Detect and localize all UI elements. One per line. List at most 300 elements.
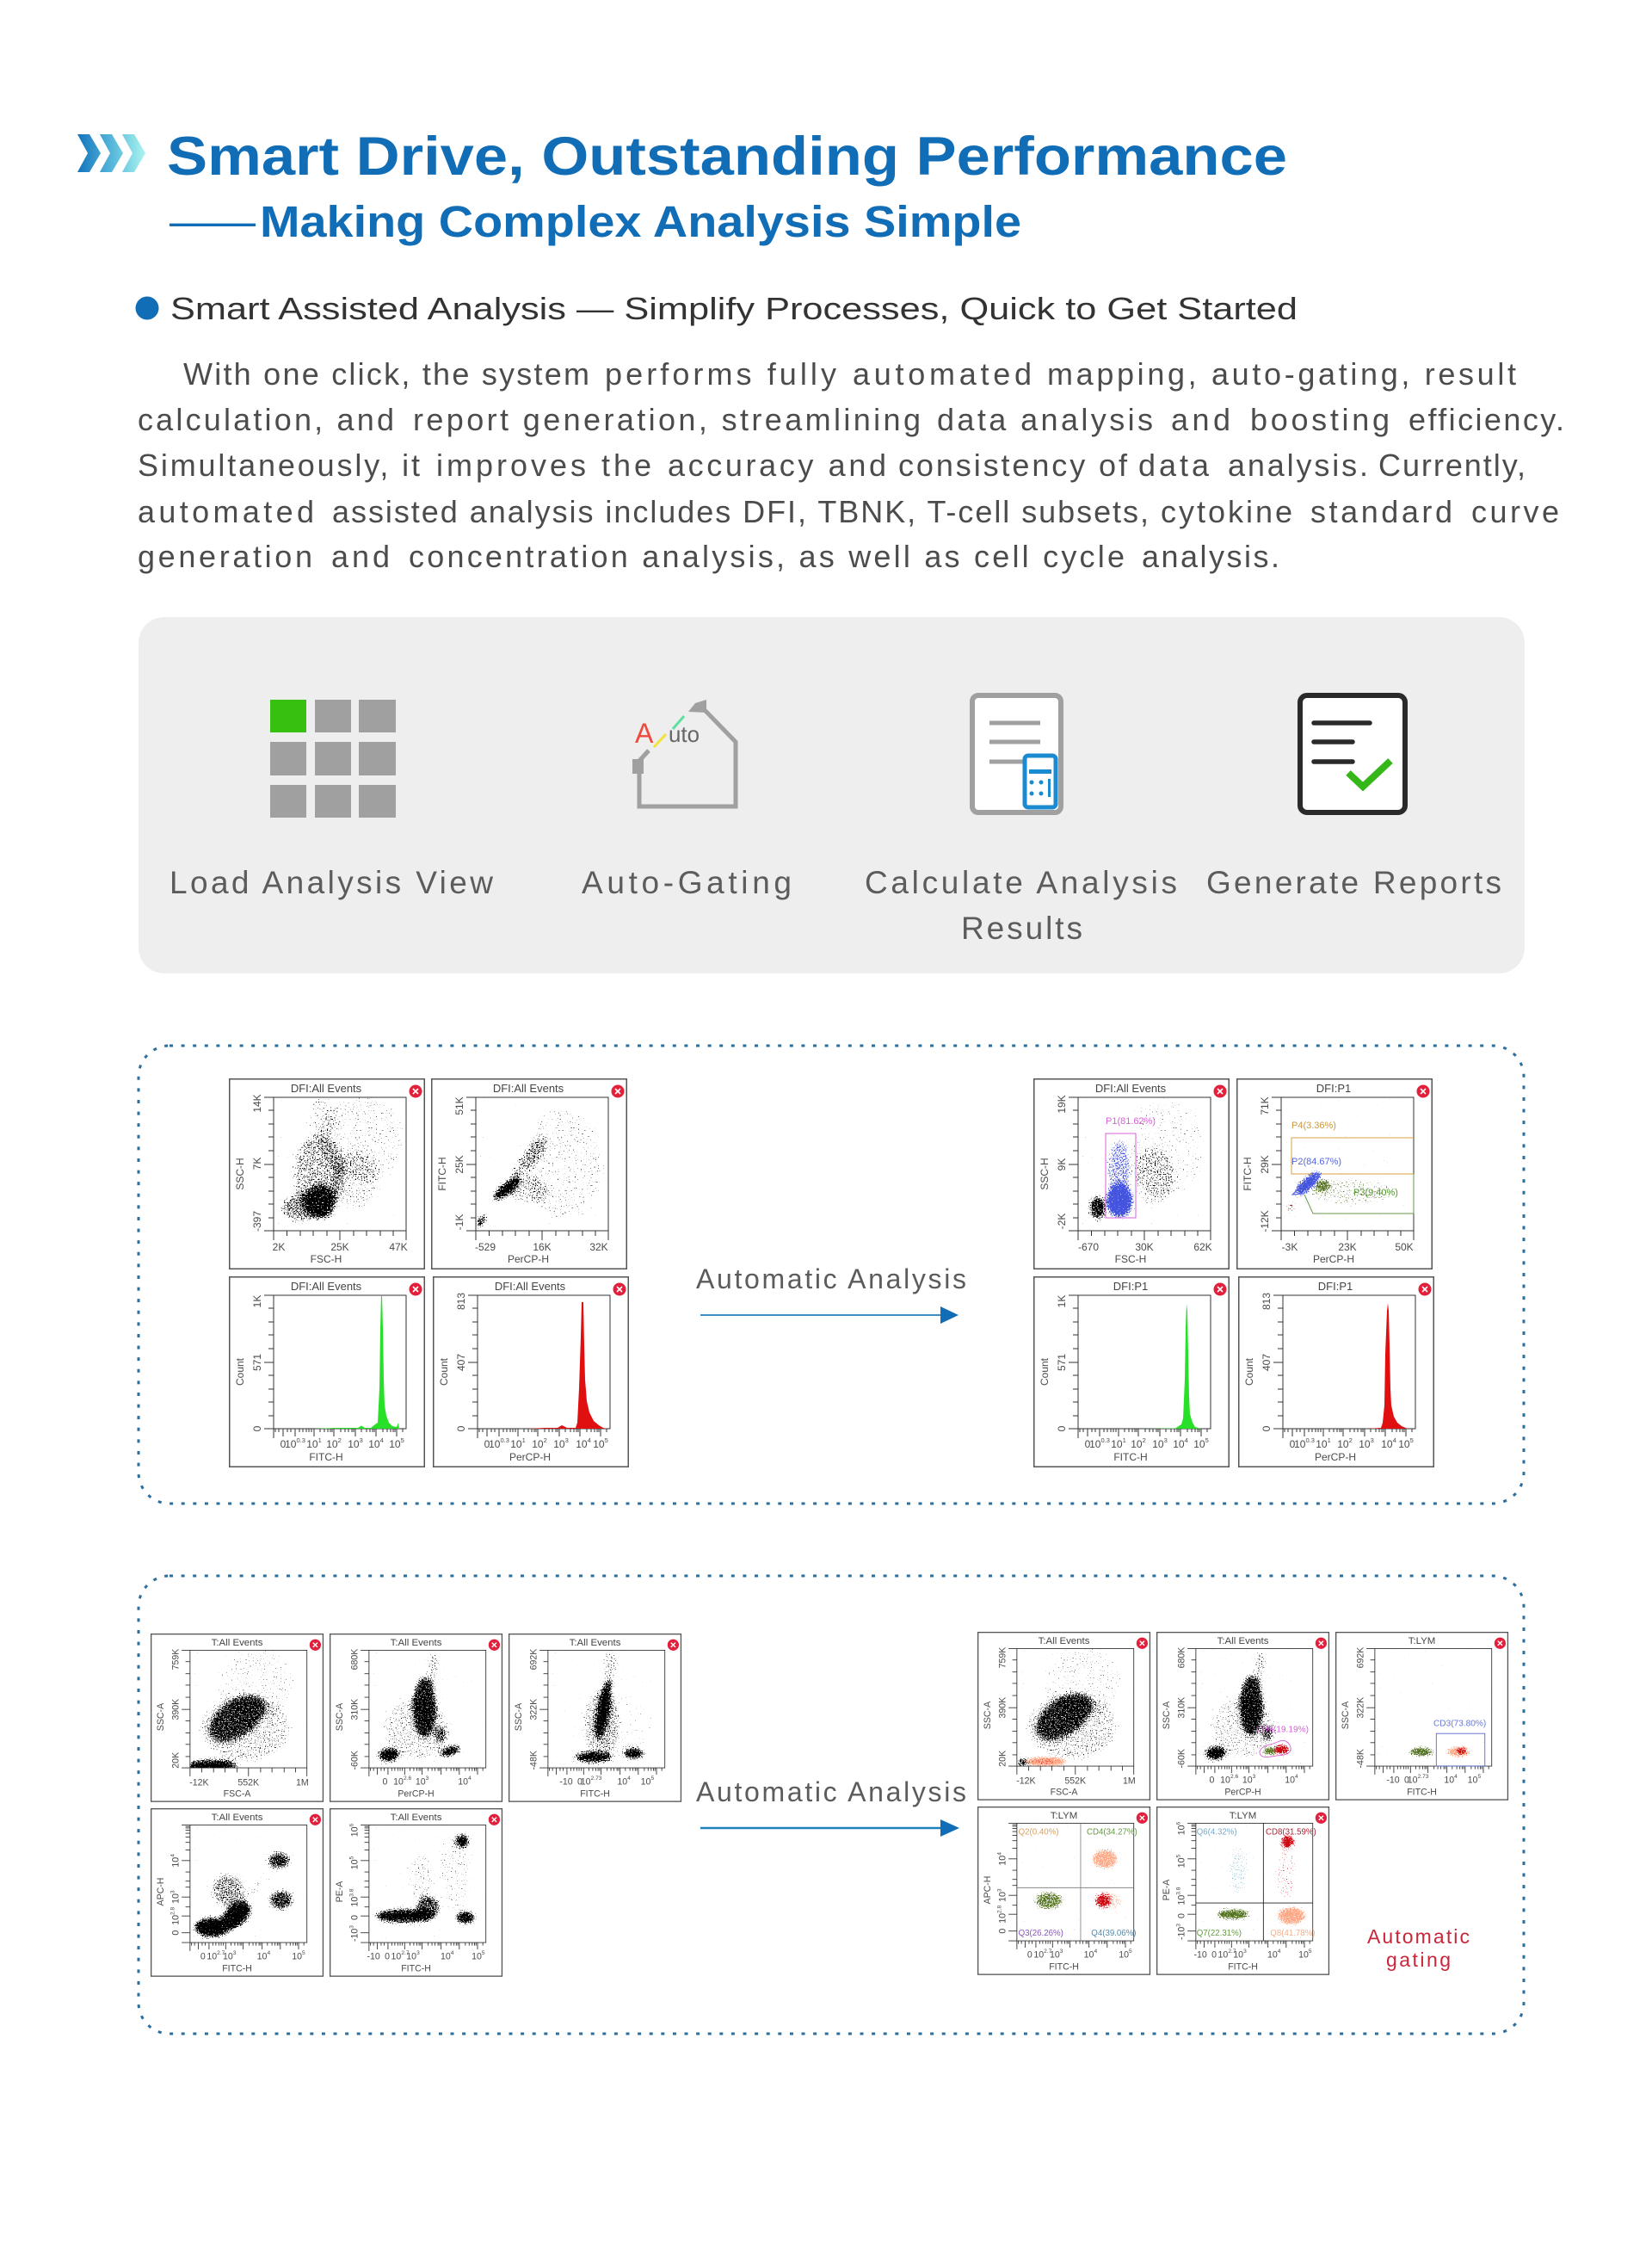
icon: auto gating house: A [635, 718, 654, 749]
chart: DFI FSC-H vs SSC-H before: -397 [251, 1211, 263, 1232]
chart: DFI PerCP-H histogram before: PerCP-H [509, 1451, 551, 1463]
chart: DFI PerCP-H histogram gated [1239, 1277, 1433, 1467]
chart: T FITC-H vs PE-A before: 2.7 [401, 1950, 410, 1956]
chart: T FITC-H vs SSC-A before: SSC-A [514, 1702, 524, 1731]
chart: T FITC-H vs APC-H gated: 4 [996, 1852, 1002, 1856]
chart: DFI FITC-H histogram gated: 10 [1173, 1438, 1185, 1450]
chart: T FITC-H vs PE-A gated: 0 [1177, 1913, 1187, 1918]
chart: T FSC-A vs SSC-A gated: T:All Events [1039, 1636, 1090, 1646]
chart: T FSC-A vs SSC-A gated: SSC-A [983, 1701, 993, 1729]
chart: T FITC-H vs PE-A gated: 3 [1175, 1924, 1181, 1927]
chart: DFI PerCP-H histogram gated: DFI:P1 [1318, 1280, 1353, 1293]
chart: T FITC-H vs APC-H gated: T:LYM [1051, 1811, 1077, 1821]
chart: T FITC-H vs SSC-A before: 10 [581, 1777, 591, 1788]
chart: T PerCP-H vs SSC-A gated: 310K [1177, 1697, 1187, 1719]
chart: T FSC-A vs SSC-A gated: 20K [998, 1751, 1008, 1767]
chart: T FSC-A vs SSC-A before: SSC-A [156, 1702, 166, 1731]
paragraph: cytokine [1161, 494, 1292, 529]
chart: T FITC-H vs SSC-A before: 4 [627, 1776, 631, 1782]
chart: DFI FITC-H histogram before: DFI:All Events [291, 1280, 362, 1293]
chart: T FITC-H vs SSC-A before: FITC-H [580, 1789, 610, 1800]
chart: T FITC-H vs PE-A before: 10 [406, 1952, 416, 1962]
chart: DFI FSC-H vs SSC-H gated: 9K [1056, 1158, 1068, 1170]
chart: DFI PerCP-H histogram gated: 813 [1261, 1293, 1273, 1310]
chart: DFI PerCP-H vs FITC-H before: 51K [453, 1096, 465, 1115]
chart: T PerCP-H vs SSC-A before: 3 [426, 1776, 429, 1782]
chart: T FSC-A vs SSC-A before: 390K [171, 1699, 182, 1720]
chart: T PerCP-H vs SSC-A before: SSC-A [335, 1702, 345, 1731]
chart: T FITC-H vs APC-H gated [978, 1807, 1150, 1974]
icon: calculate document [972, 695, 1061, 812]
chart: T FITC-H vs PE-A before: 10 [391, 1952, 401, 1962]
chart: T FITC-H vs APC-H before: 0 [171, 1930, 182, 1936]
chart: T FITC-H vs PE-A gated: CD8(31.59%) [1266, 1828, 1316, 1837]
chart: DFI PerCP-H histogram gated: 10 [1316, 1438, 1328, 1450]
label: calculate analysis results [865, 865, 1177, 946]
chart: DFI PerCP-H histogram before: Count [438, 1357, 450, 1386]
chart: T FITC-H vs APC-H before: 0 [200, 1952, 206, 1962]
chart: DFI PerCP-H vs FITC-H gated [1237, 1079, 1432, 1269]
title: Smart Drive, Outstanding Performance [167, 127, 1287, 187]
chart: DFI PerCP-H vs FITC-H gated: -3K [1282, 1241, 1298, 1253]
chart: T FSC-A vs SSC-A gated [978, 1633, 1150, 1800]
chart: T PerCP-H vs SSC-A gated: 4 [1295, 1774, 1298, 1780]
chart: DFI FSC-H vs SSC-H before: 7K [251, 1158, 263, 1170]
chart: T PerCP-H vs SSC-A before: T:All Events [391, 1638, 442, 1648]
paragraph: mapping, auto-gating, result [1047, 356, 1516, 392]
chart: T FITC-H vs APC-H before: FITC-H [222, 1964, 252, 1974]
icon: auto gating house [632, 700, 736, 806]
panel: workflow steps [139, 617, 1525, 973]
chart: T FITC-H vs PE-A before: 10 [350, 1859, 361, 1869]
chart: DFI FITC-H histogram gated: 4 [1185, 1436, 1188, 1444]
paragraph: Simultaneously, it [138, 448, 420, 483]
paragraph: data analysis [937, 402, 1153, 437]
chart: DFI PerCP-H vs FITC-H gated: P2(84.67%) [1291, 1157, 1341, 1167]
chart: T FSC-A vs SSC-A gated: 552K [1064, 1776, 1086, 1786]
arrow [700, 1819, 959, 1837]
chart: T PerCP-H vs SSC-A before: 2.6 [404, 1776, 411, 1782]
chart: T PerCP-H vs SSC-A before: 4 [468, 1776, 472, 1782]
paragraph: analysis. [1142, 539, 1279, 574]
paragraph: generation [138, 539, 312, 574]
chart: T FITC-H vs PE-A gated: 5 [1309, 1949, 1312, 1955]
chart: DFI PerCP-H vs FITC-H gated: -12K [1259, 1210, 1271, 1232]
chart: T FITC-H vs SSC-A gated: CD3(73.80%) [1433, 1719, 1486, 1728]
chart: DFI FITC-H histogram gated: 0.3 [1100, 1436, 1110, 1444]
arrow [700, 1306, 959, 1324]
chart: T PerCP-H vs SSC-A before: 0 [382, 1777, 387, 1788]
chart: DFI PerCP-H histogram gated: 2 [1349, 1436, 1353, 1444]
chart: T PerCP-H vs SSC-A gated: LYM(19.19%) [1256, 1725, 1309, 1734]
chart: DFI PerCP-H histogram before: 4 [588, 1436, 591, 1444]
chart: T FITC-H vs SSC-A before: 0 [577, 1777, 583, 1788]
chart: DFI PerCP-H histogram gated: 10 [1381, 1438, 1393, 1450]
chart: T FITC-H vs APC-H before: 10 [292, 1952, 302, 1962]
label: calculate analysis results: Results [961, 911, 1082, 946]
chart: T PerCP-H vs SSC-A gated: T:All Events [1217, 1636, 1269, 1646]
chart: T FITC-H vs APC-H before: 10 [171, 1893, 182, 1904]
chart: DFI FITC-H histogram before: 2 [338, 1436, 342, 1444]
chart: DFI PerCP-H vs FITC-H gated: PerCP-H [1313, 1253, 1354, 1265]
label: auto gating: Auto-Gating [582, 865, 792, 900]
chart: DFI PerCP-H vs FITC-H before: 25K [453, 1155, 465, 1174]
subtitle: Making Complex Analysis Simple [260, 197, 1021, 246]
paragraph: concentration analysis, as well as cell cycle [409, 539, 1125, 574]
chart: T FITC-H vs PE-A before: 0 [385, 1952, 390, 1962]
chart: T FITC-H vs PE-A gated [1157, 1807, 1328, 1974]
chart: T FITC-H vs PE-A gated: T:LYM [1230, 1811, 1256, 1821]
paragraph: report generation, streamlining [413, 402, 921, 437]
chart: T FITC-H vs APC-H gated: 10 [1033, 1950, 1044, 1961]
chart: T FITC-H vs SSC-A before: 5 [650, 1776, 654, 1782]
chart: T FITC-H vs APC-H gated: CD4(34.27%) [1087, 1828, 1137, 1837]
chart: DFI FITC-H histogram before: 10 [368, 1438, 380, 1450]
chart: T FITC-H vs SSC-A gated: -10 [1386, 1776, 1400, 1786]
chart: DFI FITC-H histogram before: 3 [360, 1436, 363, 1444]
chart: DFI FSC-H vs SSC-H before: DFI:All Events [291, 1082, 362, 1095]
chart: DFI PerCP-H vs FITC-H before: FITC-H [436, 1157, 448, 1191]
chart: DFI PerCP-H vs FITC-H before: 32K [589, 1241, 608, 1253]
chart: DFI PerCP-H histogram before: 10 [532, 1438, 544, 1450]
chart: DFI FITC-H histogram gated: 5 [1205, 1436, 1209, 1444]
chart: T PerCP-H vs SSC-A before [330, 1634, 502, 1801]
chart: DFI PerCP-H histogram before: 2 [544, 1436, 547, 1444]
chart: T FITC-H vs SSC-A gated: -48K [1356, 1749, 1366, 1768]
chart: DFI FSC-H vs SSC-H gated: -2K [1056, 1214, 1068, 1229]
chart: T FITC-H vs APC-H before: 2.7 [217, 1950, 225, 1956]
chart: T FITC-H vs PE-A before: 6 [348, 1824, 354, 1827]
chart: T FSC-A vs SSC-A gated: FSC-A [1051, 1788, 1078, 1798]
chart: T PerCP-H vs SSC-A gated: SSC-A [1162, 1701, 1172, 1729]
paragraph: performs fully [605, 356, 836, 392]
chart: T FITC-H vs SSC-A gated: 10 [1468, 1776, 1477, 1786]
chart: DFI PerCP-H histogram before: 5 [605, 1436, 608, 1444]
chart: DFI PerCP-H histogram before: DFI:All Events [495, 1280, 566, 1293]
chart: DFI PerCP-H histogram gated: 10 [1294, 1438, 1305, 1450]
chart: T FITC-H vs PE-A before: 10 [350, 1897, 361, 1907]
chart: T FSC-A vs SSC-A before: 20K [171, 1752, 182, 1769]
chart: DFI FITC-H histogram before [230, 1277, 424, 1467]
chart: DFI PerCP-H histogram before: 10 [510, 1438, 522, 1450]
chart: DFI FITC-H histogram gated: DFI:P1 [1113, 1280, 1148, 1293]
chart: T FITC-H vs APC-H gated: 10 [1084, 1950, 1094, 1961]
chart: DFI FSC-H vs SSC-H before: SSC-H [234, 1158, 246, 1190]
chart: T FITC-H vs PE-A gated: 10 [1233, 1950, 1243, 1961]
chart: T FITC-H vs APC-H before: 10 [171, 1915, 182, 1925]
paragraph: assisted analysis includes DFI, TBNK, T-cell subsets, [332, 494, 1149, 529]
chart: T FSC-A vs SSC-A gated: -12K [1016, 1776, 1036, 1786]
chart: T PerCP-H vs SSC-A before: 680K [350, 1649, 361, 1670]
chart: T FITC-H vs PE-A gated: 4 [1278, 1949, 1281, 1955]
chart: T FITC-H vs PE-A before: 10 [441, 1952, 451, 1962]
chart: DFI FITC-H histogram before: 4 [380, 1436, 384, 1444]
chart: DFI FITC-H histogram gated: FITC-H [1113, 1451, 1148, 1463]
chart: DFI FITC-H histogram gated: 10 [1131, 1438, 1143, 1450]
chart: DFI FSC-H vs SSC-H gated: SSC-H [1039, 1158, 1051, 1190]
chart: DFI FSC-H vs SSC-H before: 47K [389, 1241, 408, 1253]
panel: DFI example [139, 1046, 1524, 1504]
chart: T FITC-H vs APC-H gated: 5 [1129, 1949, 1132, 1955]
chart: T FSC-A vs SSC-A gated: 1M [1123, 1776, 1136, 1786]
paragraph: With one click, the system [183, 356, 589, 392]
chart: T FITC-H vs PE-A before: PE-A [335, 1881, 345, 1902]
chart: T FITC-H vs APC-H gated: 10 [1119, 1950, 1129, 1961]
paragraph: automated [138, 494, 314, 529]
paragraph: consistency of [898, 448, 1128, 483]
chart: T FITC-H vs PE-A gated: 10 [1177, 1825, 1187, 1835]
chart: DFI PerCP-H vs FITC-H gated: DFI:P1 [1316, 1082, 1351, 1095]
chart: T FITC-H vs PE-A gated: 0 [1211, 1950, 1217, 1961]
chart: DFI FITC-H histogram gated: 10 [1089, 1438, 1100, 1450]
paragraph: and [1171, 402, 1230, 437]
chart: T FITC-H vs PE-A gated: 10 [1267, 1950, 1278, 1961]
chart: DFI FITC-H histogram gated: 1K [1056, 1295, 1068, 1307]
chart: DFI PerCP-H vs FITC-H gated: P3(9.40%) [1353, 1188, 1398, 1198]
chart: T FITC-H vs SSC-A before: T:All Events [570, 1638, 621, 1648]
icon: load analysis view grid [270, 700, 396, 818]
chart: DFI PerCP-H histogram gated: 10 [1359, 1438, 1371, 1450]
chart: DFI FSC-H vs SSC-H before: FSC-H [311, 1253, 342, 1265]
chart: T PerCP-H vs SSC-A gated: 10 [1285, 1776, 1295, 1786]
chart: DFI FITC-H histogram before: 1 [318, 1436, 322, 1444]
chart: T FSC-A vs SSC-A gated: 759K [998, 1647, 1008, 1668]
chart: T FITC-H vs PE-A gated: Q6(4.32%) [1197, 1828, 1237, 1837]
chart: T FITC-H vs APC-H before: 5 [302, 1950, 305, 1956]
chart: DFI FSC-H vs SSC-H gated: -670 [1078, 1241, 1099, 1253]
label: automatic gating [1367, 1925, 1470, 1971]
chart: T FITC-H vs PE-A gated: -10 [1177, 1927, 1187, 1940]
chart: T FITC-H vs APC-H gated: 0 [1027, 1950, 1032, 1961]
chart: T FITC-H vs PE-A before: 4 [451, 1950, 454, 1956]
chart: DFI FSC-H vs SSC-H gated: P1(81.62%) [1106, 1116, 1156, 1127]
chart: DFI PerCP-H histogram gated: 407 [1261, 1354, 1273, 1371]
chart: T FSC-A vs SSC-A before: T:All Events [212, 1638, 263, 1648]
chart: T PerCP-H vs SSC-A gated: 3 [1253, 1774, 1256, 1780]
chart: T FITC-H vs PE-A before: -10 [350, 1929, 361, 1942]
chart: T FSC-A vs SSC-A before [151, 1634, 323, 1801]
chart: DFI FSC-H vs SSC-H before: 2K [273, 1241, 285, 1253]
chart: T FITC-H vs APC-H gated: 3 [996, 1888, 1002, 1892]
chart: DFI FITC-H histogram before: 1K [251, 1295, 263, 1307]
panel: T-cell example [139, 1576, 1524, 2034]
chart: DFI FITC-H histogram gated: 571 [1056, 1354, 1068, 1371]
chart: T FITC-H vs SSC-A gated: 692K [1356, 1647, 1366, 1668]
chart: T FITC-H vs APC-H before: 10 [223, 1952, 233, 1962]
paragraph: efficiency. [1409, 402, 1564, 437]
chart: DFI PerCP-H histogram before: 10 [553, 1438, 565, 1450]
chart: DFI PerCP-H histogram gated: 0 [1261, 1425, 1273, 1431]
chart: DFI PerCP-H histogram gated: PerCP-H [1315, 1451, 1356, 1463]
icon: section chevrons [77, 134, 145, 172]
chart: T FSC-A vs SSC-A before: 552K [237, 1777, 259, 1788]
chart: T PerCP-H vs SSC-A gated: 2.6 [1230, 1774, 1238, 1780]
chart: DFI FITC-H histogram before: 10 [326, 1438, 338, 1450]
chart: DFI PerCP-H vs FITC-H before: -1K [453, 1214, 465, 1230]
label: automatic gating: gating [1386, 1949, 1451, 1971]
paragraph: and [331, 539, 390, 574]
chart: T FITC-H vs PE-A before: 0 [350, 1915, 361, 1920]
chart: DFI PerCP-H histogram before: 3 [565, 1436, 569, 1444]
chart: T FSC-A vs SSC-A before: 1M [296, 1777, 309, 1788]
chart: T FITC-H vs APC-H before: 2.8 [170, 1906, 176, 1915]
chart: T FITC-H vs APC-H gated: 2.7 [1044, 1949, 1052, 1955]
chart: DFI PerCP-H vs FITC-H gated: 71K [1259, 1096, 1271, 1115]
chart: T FITC-H vs SSC-A gated: 2.73 [1418, 1774, 1429, 1780]
chart: T FITC-H vs SSC-A before: 10 [617, 1777, 627, 1788]
chart: DFI PerCP-H histogram gated: 1 [1328, 1436, 1331, 1444]
chart: T PerCP-H vs SSC-A gated: 10 [1242, 1776, 1253, 1786]
chart: T FITC-H vs APC-H before: 3 [170, 1890, 176, 1893]
chart: DFI PerCP-H histogram before [434, 1277, 628, 1467]
chart: T PerCP-H vs SSC-A before: 310K [350, 1699, 361, 1720]
chart: DFI PerCP-H vs FITC-H gated: FITC-H [1242, 1157, 1254, 1191]
chart: T FITC-H vs APC-H gated: Q2(0.40%) [1019, 1828, 1058, 1837]
chart: DFI PerCP-H vs FITC-H gated: P4(3.36%) [1291, 1121, 1336, 1131]
chart: T FSC-A vs SSC-A before: -12K [189, 1777, 209, 1788]
chart: T PerCP-H vs SSC-A before: 10 [393, 1777, 404, 1788]
label: load analysis view: Load Analysis View [170, 865, 493, 900]
chart: DFI PerCP-H histogram before: 813 [455, 1293, 467, 1310]
chart: DFI FITC-H histogram before: 10 [306, 1438, 318, 1450]
chart: DFI FSC-H vs SSC-H before [230, 1079, 424, 1269]
chart: T FITC-H vs PE-A before: T:All Events [391, 1813, 442, 1823]
chart: T FITC-H vs PE-A before [330, 1809, 502, 1976]
chart: DFI FSC-H vs SSC-H before: 14K [251, 1094, 263, 1113]
chart: DFI FITC-H histogram before: 0.3 [296, 1436, 305, 1444]
chart: T PerCP-H vs SSC-A gated: PerCP-H [1224, 1788, 1261, 1798]
chart: T FSC-A vs SSC-A before: FSC-A [224, 1789, 251, 1800]
chart: DFI PerCP-H vs FITC-H gated: 50K [1395, 1241, 1414, 1253]
subtitle: —— [170, 197, 256, 245]
paragraph: analysis. [1228, 448, 1368, 483]
chart: DFI PerCP-H histogram before: 0.3 [500, 1436, 509, 1444]
chart: T FITC-H vs APC-H gated: FITC-H [1049, 1962, 1079, 1973]
chart: DFI PerCP-H histogram before: 407 [455, 1354, 467, 1371]
chart: T FITC-H vs SSC-A before: 2.73 [591, 1776, 602, 1782]
chart: T FITC-H vs PE-A gated: FITC-H [1228, 1962, 1258, 1973]
chart: T FITC-H vs PE-A gated: 3.8 [1175, 1887, 1181, 1895]
chart: T FITC-H vs APC-H gated: Q4(39.06%) [1091, 1929, 1137, 1938]
chart: T FITC-H vs PE-A gated: Q7(22.31%) [1197, 1929, 1242, 1938]
chart: DFI FITC-H histogram before: 0 [280, 1438, 287, 1450]
icon: report with check [1300, 695, 1405, 812]
paragraph: improves the [436, 448, 651, 483]
chart: DFI PerCP-H vs FITC-H gated: 23K [1338, 1241, 1357, 1253]
chart: DFI PerCP-H histogram gated: 10 [1337, 1438, 1349, 1450]
chart: DFI FITC-H histogram gated: 10 [1111, 1438, 1123, 1450]
chart: T FITC-H vs APC-H gated: 10 [998, 1856, 1008, 1866]
chart: T FITC-H vs SSC-A gated: 4 [1454, 1774, 1458, 1780]
chart: T FITC-H vs SSC-A gated: 10 [1444, 1776, 1454, 1786]
chart: DFI PerCP-H histogram gated: 0.3 [1305, 1436, 1315, 1444]
paragraph: standard [1310, 494, 1452, 529]
chart: DFI PerCP-H vs FITC-H before: PerCP-H [508, 1253, 549, 1265]
chart: T FITC-H vs PE-A gated: PE-A [1162, 1879, 1172, 1900]
chart: DFI FITC-H histogram before: 0 [251, 1425, 263, 1431]
chart: T FITC-H vs SSC-A before [509, 1634, 681, 1801]
chart: DFI PerCP-H histogram gated: 0 [1290, 1438, 1296, 1450]
chart: DFI FITC-H histogram gated: 2 [1143, 1436, 1146, 1444]
chart: T FITC-H vs PE-A before: 5 [482, 1950, 485, 1956]
chart: T FITC-H vs APC-H before: 10 [171, 1857, 182, 1868]
chart: T PerCP-H vs SSC-A before: -60K [350, 1751, 361, 1770]
chart: T PerCP-H vs SSC-A before: PerCP-H [398, 1789, 435, 1800]
chart: DFI FSC-H vs SSC-H gated: DFI:All Events [1095, 1082, 1167, 1095]
chart: T PerCP-H vs SSC-A gated: 0 [1209, 1776, 1214, 1786]
chart: T FITC-H vs APC-H before: 10 [206, 1952, 217, 1962]
chart: DFI PerCP-H vs FITC-H gated: 29K [1259, 1155, 1271, 1174]
chart: T FITC-H vs PE-A gated: 2.7 [1228, 1949, 1236, 1955]
paragraph: automated [853, 356, 1032, 392]
chart: DFI PerCP-H vs FITC-H before: 16K [533, 1241, 552, 1253]
chart: T FITC-H vs SSC-A gated [1336, 1633, 1507, 1800]
chart: T FITC-H vs PE-A before: 10 [472, 1952, 482, 1962]
chart: T FITC-H vs PE-A gated: 10 [1218, 1950, 1228, 1961]
chart: T FITC-H vs PE-A gated: -10 [1194, 1950, 1207, 1961]
chart: DFI FITC-H histogram gated: 10 [1152, 1438, 1164, 1450]
chart: T FITC-H vs SSC-A gated: 5 [1477, 1774, 1481, 1780]
chart: DFI FSC-H vs SSC-H gated: FSC-H [1115, 1253, 1146, 1265]
chart: T FITC-H vs SSC-A before: 692K [529, 1649, 539, 1670]
chart: T FITC-H vs SSC-A before: 322K [529, 1699, 539, 1720]
label: automatic analysis: Automatic Analysis [696, 1263, 966, 1294]
chart: T PerCP-H vs SSC-A before: 10 [458, 1777, 468, 1788]
chart: DFI PerCP-H histogram before: 0 [455, 1425, 467, 1431]
chart: DFI FITC-H histogram before: FITC-H [309, 1451, 343, 1463]
label: automatic analysis: Automatic Analysis [696, 1776, 966, 1807]
chart: T FITC-H vs APC-H gated: 3 [1060, 1949, 1063, 1955]
chart: T FITC-H vs APC-H gated: 10 [1050, 1950, 1060, 1961]
chart: DFI PerCP-H histogram before: 10 [576, 1438, 588, 1450]
paragraph: accuracy and [668, 448, 886, 483]
chart: DFI PerCP-H histogram gated: Count [1243, 1357, 1255, 1386]
icon: auto gating house: uto [669, 721, 700, 747]
chart: T FITC-H vs PE-A gated: 5 [1175, 1854, 1181, 1857]
paragraph: Currently, [1378, 448, 1526, 483]
chart: T FITC-H vs APC-H gated: APC-H [983, 1876, 993, 1904]
chart: T FITC-H vs PE-A before: 10 [350, 1827, 361, 1837]
chart: T FITC-H vs PE-A gated: 3 [1243, 1949, 1247, 1955]
paragraph: boosting [1250, 402, 1390, 437]
chart: T FITC-H vs APC-H before: 3 [233, 1950, 237, 1956]
chart: DFI FITC-H histogram before: 571 [251, 1354, 263, 1371]
chart: DFI FITC-H histogram gated: 0 [1056, 1425, 1068, 1431]
chart: DFI FITC-H histogram before: 5 [401, 1436, 404, 1444]
chart: T FITC-H vs SSC-A before: 10 [641, 1777, 650, 1788]
chart: DFI PerCP-H vs FITC-H before: DFI:All Events [493, 1082, 564, 1095]
chart: DFI PerCP-H histogram gated: 3 [1371, 1436, 1374, 1444]
chart: T FITC-H vs APC-H gated: Q3(26.26%) [1019, 1929, 1063, 1938]
chart: T PerCP-H vs SSC-A gated [1157, 1633, 1328, 1800]
chart: T FITC-H vs PE-A gated: Q8(41.78%) [1270, 1929, 1316, 1938]
chart: T FITC-H vs SSC-A gated: 322K [1356, 1697, 1366, 1719]
chart: DFI FSC-H vs SSC-H gated [1034, 1079, 1229, 1269]
chart: DFI FITC-H histogram before: 10 [389, 1438, 401, 1450]
chart: T FITC-H vs PE-A before: 3 [348, 1925, 354, 1929]
chart: T PerCP-H vs SSC-A gated: 680K [1177, 1647, 1187, 1668]
chart: DFI FITC-H histogram gated: 1 [1123, 1436, 1126, 1444]
chart: DFI PerCP-H vs FITC-H before [432, 1079, 626, 1269]
chart: DFI FSC-H vs SSC-H gated: 19K [1056, 1095, 1068, 1114]
bullet heading: Smart Assisted Analysis — Simplify Processes, Quick to Get Started [170, 291, 1298, 326]
chart: DFI FITC-H histogram gated: Count [1039, 1357, 1051, 1386]
chart: DFI PerCP-H histogram before: 0 [484, 1438, 490, 1450]
chart: DFI PerCP-H histogram before: 1 [522, 1436, 526, 1444]
chart: T FITC-H vs SSC-A gated: 10 [1408, 1776, 1418, 1786]
chart: DFI PerCP-H vs FITC-H before: -529 [475, 1241, 496, 1253]
chart: DFI FITC-H histogram before: 10 [348, 1438, 360, 1450]
